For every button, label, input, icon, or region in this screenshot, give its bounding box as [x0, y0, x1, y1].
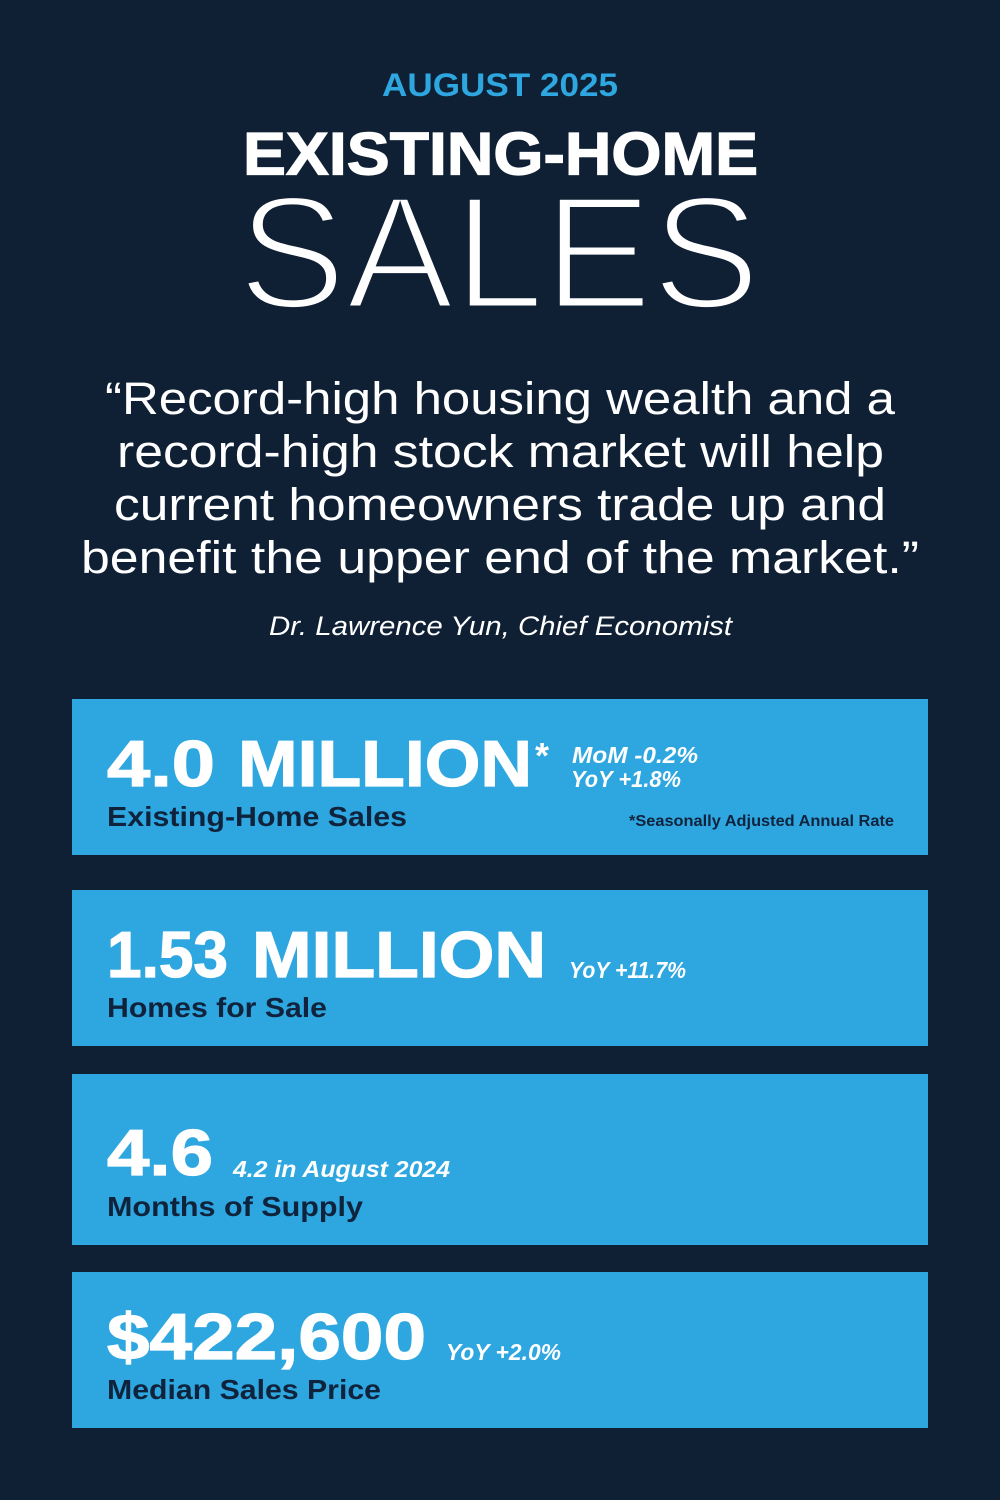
date heading: AUGUST 2025	[382, 67, 618, 103]
footnote: *Seasonally Adjusted Annual Rate	[629, 813, 894, 830]
month over month change: MoM -0.2%	[572, 742, 698, 768]
label: Existing-Home Sales	[107, 801, 407, 832]
panel: median sales price	[72, 1272, 928, 1428]
year over year change: YoY +11.7%	[569, 957, 686, 983]
year over year change: YoY +2.0%	[446, 1339, 561, 1365]
prior year comparison: 4.2 in August 2024	[232, 1156, 450, 1182]
quote: current homeowners trade up and	[114, 479, 886, 530]
quote: record-high stock market will help	[117, 426, 884, 477]
stat: sales figure: MILLION	[238, 727, 532, 800]
stat: inventory figure: 1.53	[107, 918, 228, 991]
quote	[81, 373, 919, 583]
stat: sales figure: 4.0	[107, 727, 215, 800]
panel: existing-home sales	[72, 699, 928, 855]
stat: supply figure: 4.6	[107, 1116, 213, 1189]
label: Homes for Sale	[107, 992, 327, 1023]
stat: inventory figure: MILLION	[252, 918, 546, 991]
year over year change: YoY +1.8%	[571, 766, 681, 792]
title: existing-home: EXISTING-HOME	[243, 120, 758, 188]
title: sales: SALES	[238, 163, 760, 343]
quote attribution: Dr. Lawrence Yun, Chief Economist	[269, 611, 734, 641]
panel: months of supply	[72, 1074, 928, 1245]
panel: homes for sale	[72, 890, 928, 1046]
quote: benefit the upper end of the market.”	[81, 532, 919, 583]
asterisk: *	[535, 735, 549, 776]
label: Months of Supply	[107, 1191, 363, 1222]
header	[238, 67, 760, 343]
label: Median Sales Price	[107, 1374, 381, 1405]
stat: price figure: $422,600	[107, 1300, 426, 1373]
quote: “Record-high housing wealth and a	[105, 373, 896, 424]
